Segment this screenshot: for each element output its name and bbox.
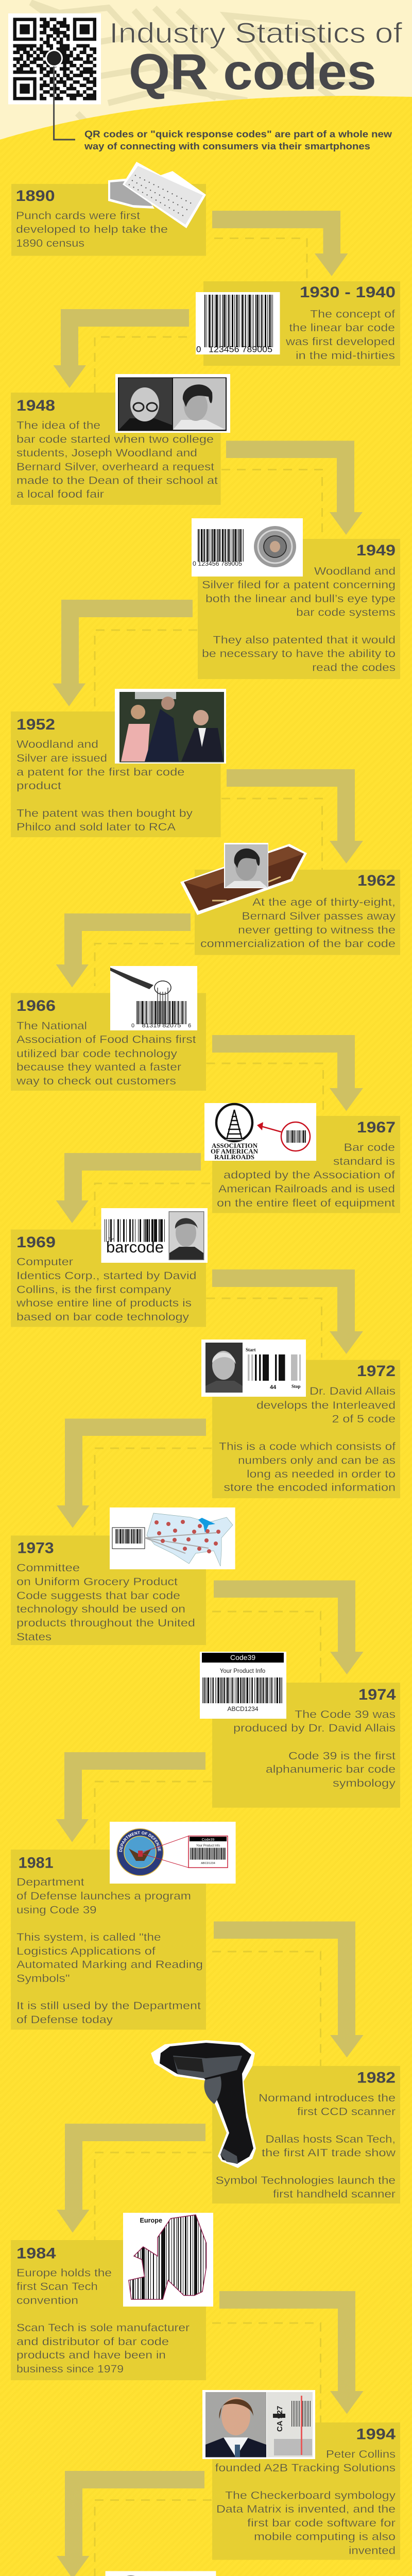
panel: 1981 [11, 1822, 236, 2030]
image: David Allais and interleaved code: Start [246, 1347, 255, 1352]
1981 text: of Defense today [16, 2014, 113, 2026]
1973 text: Code suggests that bar code [16, 1590, 180, 1602]
image: linear and bull's eye code [192, 518, 303, 577]
1952 text: The patent was then bought by [16, 808, 193, 819]
1962 text: At the age of thirty-eight, [252, 896, 396, 908]
image: barcode and US map [110, 1507, 235, 1569]
panel: 1973 [11, 1507, 235, 1645]
panel: 1930-1940 [196, 281, 400, 366]
QR code with pointer [8, 13, 101, 140]
image: punch card in hand [108, 162, 206, 228]
1949 text: Woodland and [314, 566, 396, 577]
1974 text: Code 39 is the first [288, 1750, 396, 1762]
image: Association of American Railroads logo: RAILROADS [214, 1154, 254, 1161]
1962 text [200, 896, 396, 950]
1930 text: The concept of [310, 308, 395, 320]
1981 text: Symbols" [16, 1973, 70, 1985]
1948 text: students, Joseph Woodland and [16, 447, 197, 459]
1994 text: mobile computing is also [254, 2531, 396, 2543]
1994 text: Peter Collins [326, 2448, 396, 2461]
1982 text: the first AIT trade show [262, 2147, 396, 2159]
1952 text: a patent for the first bar code [16, 767, 184, 778]
1981 text [16, 1876, 203, 2026]
panel: 1969 [11, 1208, 208, 1327]
1994 text: Data Matrix is invented, and the [216, 2503, 396, 2515]
1973 text: Committee [16, 1562, 80, 1574]
image: Department of Defense seal and Code39 [110, 1822, 236, 1884]
panel: 1982: 1982 [357, 2070, 396, 2087]
panel: 1969: 1969 [16, 1234, 56, 1251]
1974 text [233, 1709, 396, 1789]
panel: 1962: 1962 [357, 872, 396, 889]
1972 text: develops the Interleaved [256, 1399, 396, 1412]
1981 text: It is still used by the Department [16, 2000, 201, 2012]
1982 text [215, 2092, 396, 2200]
1994 text [215, 2448, 396, 2556]
1967 text: standard is [333, 1156, 395, 1167]
1966 text: The National [16, 1020, 87, 1032]
panel: 1984: 1984 [16, 2245, 56, 2262]
1949 text: read the codes [312, 662, 396, 674]
1890 text [16, 210, 168, 249]
image: Department of Defense seal and Code39: DEPARTMENT OF DEFENSE [119, 1831, 161, 1852]
panel: 1981: 1981 [19, 1855, 54, 1871]
1984 text [16, 2267, 190, 2375]
1969 text: Collins, is the first company [16, 1284, 171, 1296]
1974 text: alphanumeric bar code [266, 1764, 396, 1775]
image: coffin and portrait of Silver [180, 843, 307, 915]
1930 text: the linear bar code [289, 322, 395, 334]
panel: 1967 [204, 1103, 400, 1213]
1982 text: first CCD scanner [297, 2106, 396, 2118]
panel: 1972: 1972 [357, 1363, 396, 1380]
1949 text [202, 566, 396, 674]
panel: 1949: 1949 [356, 542, 396, 559]
1981 text: using Code 39 [16, 1904, 97, 1916]
1994 text: first bar code software for [247, 2517, 396, 2529]
1984 text: business since 1979 [16, 2363, 124, 2375]
1984 text: convention [16, 2295, 78, 2307]
panel: 1967: 1967 [357, 1119, 396, 1136]
image: barcode logo and David Collins portrait: The [108, 1238, 114, 1241]
1982 text: Symbol Technologies launch the [215, 2175, 396, 2187]
panel: 1999 [11, 2571, 216, 2576]
image: Peter Collins and scanned label [202, 2390, 315, 2459]
image: barcode logo and David Collins portrait: barcode [106, 1238, 164, 1256]
intro text: QR codes or "quick response codes" are part of a whole new [84, 129, 392, 139]
image: JIS logo and QR code [106, 2571, 216, 2576]
1949 text: Silver filed for a patent concerning [202, 579, 396, 591]
arrows between timeline entries [53, 211, 364, 2576]
1973 text: technology should be used on [16, 1603, 185, 1615]
1974 text: produced by Dr. David Allais [233, 1722, 396, 1734]
1890 text: 1890 census [16, 238, 84, 249]
1967 text [217, 1142, 395, 1209]
1949 text: They also patented that it would [213, 634, 396, 646]
panel: 1974 [200, 1652, 400, 1808]
panel: 1962 [180, 843, 400, 955]
1994 text: invented [349, 2545, 396, 2556]
image: Code39 label: ABCD1234 [227, 1705, 259, 1713]
1973 text: on Uniform Grocery Product [16, 1576, 178, 1588]
image: Department of Defense seal and Code39: Your Product Info [196, 1844, 220, 1848]
image: Department of Defense seal and Code39: ABCD1234 [201, 1862, 215, 1865]
1981 text: Department [16, 1876, 84, 1888]
1972 text: store the encoded information [224, 1482, 396, 1494]
image: Association of American Railroads logo: ASSOCIATION [212, 1142, 258, 1149]
1952 text: Woodland and [16, 739, 98, 751]
1972 text [219, 1385, 396, 1494]
image: barcode logo and David Collins portrait [101, 1208, 208, 1263]
panel: 1948 [11, 374, 230, 505]
panel: 1948: 1948 [16, 397, 55, 414]
1972 text: Dr. David Allais [310, 1385, 396, 1397]
image: barcode: 123456 789005 [209, 344, 272, 354]
1948 text: made to the Dean of their school at [16, 475, 218, 486]
panel: 1994: 1994 [356, 2426, 396, 2443]
image: portraits of Woodland and Silver [115, 374, 230, 433]
1969 text: based on bar code technology [16, 1311, 190, 1323]
image: handheld scanner [151, 2040, 256, 2168]
panel: 1966 [11, 966, 206, 1091]
image: linear and bull's eye code: 0 123456 789005 [193, 560, 242, 567]
1972 text: This is a code which consists of [219, 1441, 396, 1453]
panel: 1966: 1966 [16, 997, 56, 1014]
intro text: way of connecting with consumers via their smartphones [84, 141, 370, 151]
1952 text: product [16, 780, 61, 792]
image: spaghetti fork barcode: 81319 82075 [142, 1023, 181, 1029]
1949 text: both the linear and bull’s eye type [205, 593, 396, 605]
image: patent ceremony photo [115, 689, 226, 764]
image: Peter Collins and scanned label: CA 927 [276, 2406, 284, 2432]
1972 text: long as needed in order to [247, 1468, 396, 1480]
intro text [84, 129, 392, 151]
1966 text: utilized bar code technology [16, 1048, 178, 1060]
1962 text: Bernard Silver passes away [242, 910, 396, 922]
1966 text: because they wanted a faster [16, 1061, 181, 1073]
panel: 1952: 1952 [16, 716, 55, 733]
1969 text [16, 1256, 196, 1323]
1982 text: first handheld scanner [273, 2189, 396, 2200]
1967 text: American Railroads and is used [218, 1183, 395, 1195]
decorative faint QR pattern behind title [31, 3, 360, 155]
1930 text [285, 308, 395, 362]
1969 text: Computer [16, 1256, 73, 1268]
image: David Allais and interleaved code [201, 1340, 306, 1397]
title: Industry Statistics of [109, 16, 402, 49]
1966 text: Association of Food Chains first [16, 1033, 196, 1046]
1890 text: developed to help take the [16, 224, 168, 235]
panel: 1984 [11, 2213, 213, 2380]
1974 text: The Code 39 was [295, 1709, 396, 1721]
image: Association of American Railroads logo [204, 1103, 316, 1161]
title: QR codes [129, 43, 376, 100]
1952 text: Philco and sold later to RCA [16, 821, 176, 833]
1969 text: whose entire line of products is [16, 1297, 192, 1309]
1981 text: This system, is called "the [16, 1931, 161, 1943]
panel: 1994 [202, 2390, 400, 2560]
image: barcode: 0 [196, 344, 201, 354]
1981 text: Automated Marking and Reading [16, 1959, 203, 1971]
image: David Allais and interleaved code: 44 [270, 1384, 277, 1391]
1949 text: be necessary to have the ability to [202, 648, 396, 660]
1973 text: States [16, 1631, 52, 1643]
panel: 1949 [192, 518, 400, 679]
1967 text: on the entire fleet of equipment [217, 1197, 395, 1209]
image: Europe barcode map [123, 2213, 213, 2307]
1962 text: never getting to witness the [238, 924, 396, 936]
panel: 1972 [201, 1340, 400, 1498]
1890 text: Punch cards were first [16, 210, 140, 222]
panel: 1930-1940: 1930 - 1940 [300, 284, 396, 301]
image: Europe barcode map: Europe [140, 2216, 162, 2224]
1966 text [16, 1020, 196, 1087]
image: Association of American Railroads logo: OF AMERICAN [211, 1148, 258, 1155]
1984 text: Scan Tech is sole manufacturer [16, 2322, 190, 2334]
image: spaghetti fork barcode: 6 [188, 1023, 191, 1029]
1981 text: Logistics Applications of [16, 1945, 156, 1957]
1948 text: Bernard Silver, overheard a request [16, 461, 214, 473]
1982 text: Normand introduces the [259, 2092, 396, 2104]
image: Code39 label: Code39 [230, 1653, 255, 1662]
1973 text [16, 1562, 195, 1643]
1930 text: in the mid-thirties [296, 350, 395, 362]
1969 text: Identics Corp., started by David [16, 1270, 197, 1282]
1984 text: Europe holds the [16, 2267, 112, 2279]
image: spaghetti fork barcode: 0 [131, 1023, 134, 1029]
1984 text: products and have been in [16, 2349, 166, 2361]
1962 text: commercialization of the bar code [200, 938, 396, 950]
1981 text: of Defense launches a program [16, 1890, 191, 1902]
1967 text: adopted by the Association of [224, 1170, 395, 1181]
1952 text: Silver are issued [16, 752, 107, 765]
1948 text [16, 419, 218, 500]
panel: 1952 [11, 689, 226, 837]
image: spaghetti fork barcode [110, 966, 197, 1030]
1972 text: 2 of 5 code [332, 1413, 396, 1425]
image: Code39 label [200, 1652, 286, 1719]
1952 text [16, 739, 193, 833]
1974 text: symbology [333, 1777, 396, 1789]
panel: 1890: 1890 [16, 188, 55, 205]
panel: 1982 [151, 2040, 400, 2204]
1984 text: first Scan Tech [16, 2281, 98, 2293]
panel: 1973: 1973 [18, 1540, 54, 1557]
image: Code39 label: Your Product Info [220, 1668, 265, 1674]
1994 text: The Checkerboard symbology [225, 2489, 396, 2502]
panel: 1974: 1974 [358, 1686, 396, 1703]
1948 text: a local food fair [16, 488, 104, 500]
1972 text: numbers only and can be as [238, 1455, 396, 1466]
image: barcode [196, 292, 280, 354]
1949 text: bar code systems [296, 607, 396, 619]
1948 text: The idea of the [16, 419, 100, 432]
1966 text: way to check out customers [16, 1075, 176, 1087]
1930 text: was first developed [285, 336, 395, 348]
1982 text: Dallas hosts Scan Tech, [266, 2133, 396, 2145]
1948 text: bar code started when two college [16, 434, 214, 445]
title [109, 16, 402, 100]
1984 text: and distributor of bar code [16, 2336, 169, 2348]
1994 text: founded A2B Tracking Solutions [215, 2462, 396, 2474]
1967 text: Bar code [344, 1142, 395, 1154]
image: Department of Defense seal and Code39: Code39 [202, 1838, 214, 1842]
panel: 1890 [11, 162, 206, 256]
image: David Allais and interleaved code: Stop [291, 1384, 301, 1389]
1973 text: products throughout the United [16, 1617, 195, 1629]
